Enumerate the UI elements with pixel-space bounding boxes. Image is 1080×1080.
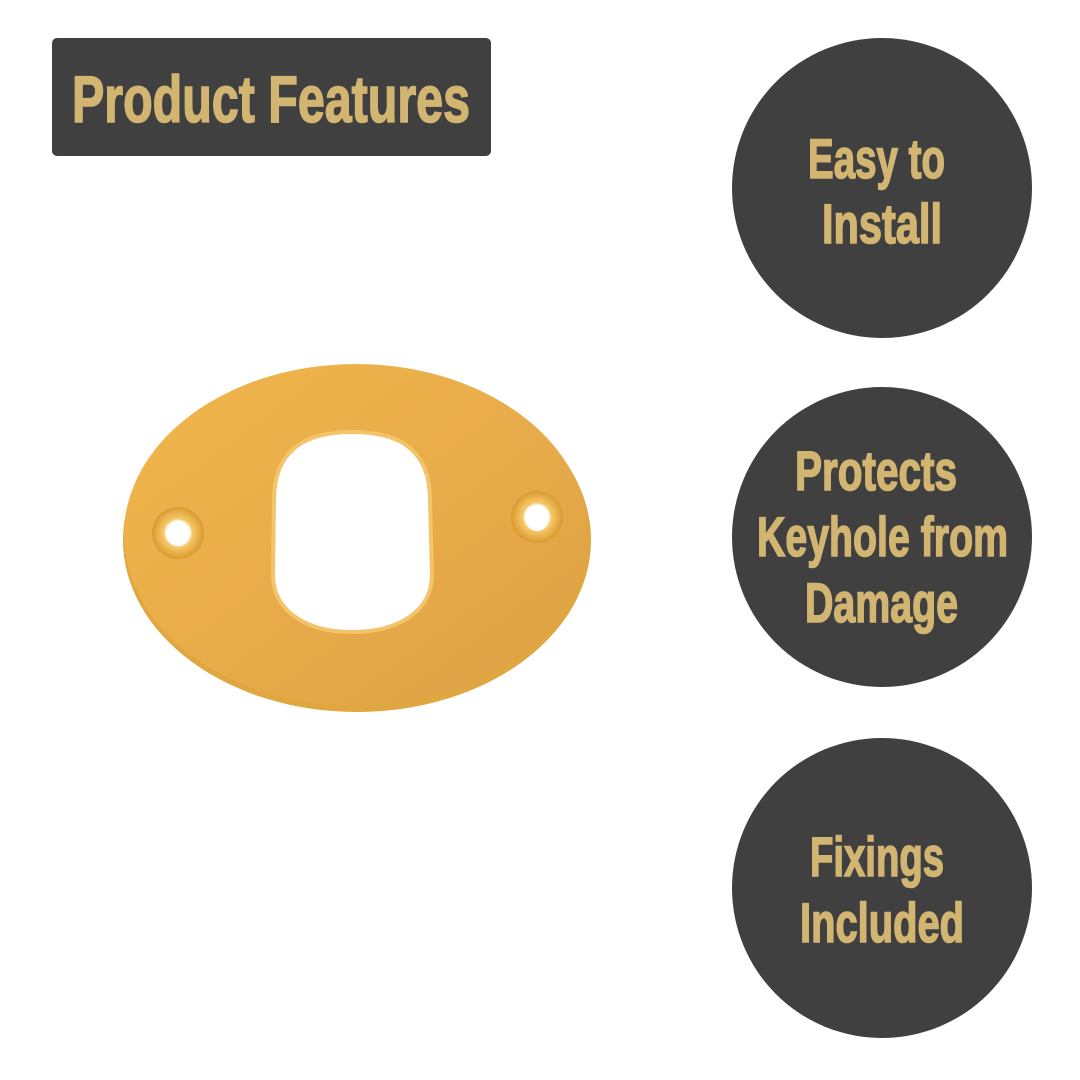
screw hole left [152, 507, 204, 559]
feature circle: fixings included: Included [800, 891, 964, 954]
feature circle: fixings included: Fixings [810, 825, 944, 888]
product image: brass escutcheon plate [123, 364, 591, 712]
feature circle: easy to install: Easy to [808, 127, 945, 190]
feature circle: easy to install [732, 38, 1032, 338]
title [52, 38, 491, 156]
feature circle: fixings included [732, 738, 1032, 1038]
feature circle: protects keyhole [732, 387, 1032, 687]
screw hole right [511, 491, 563, 543]
feature circle: protects keyhole: Protects [795, 439, 957, 502]
title: Product Features [72, 62, 470, 136]
feature circle: protects keyhole: Damage [805, 571, 958, 634]
feature circle: easy to install: Install [822, 192, 942, 255]
keyhole slot [273, 432, 432, 632]
